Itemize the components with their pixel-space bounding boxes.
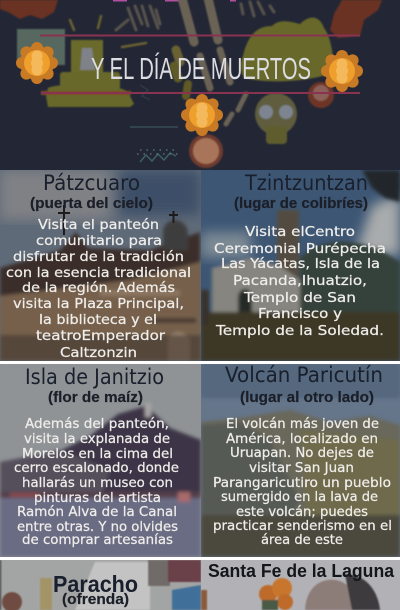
decoration: bones [70,0,274,124]
panel: Pátzcuaro [0,170,201,361]
photo: church and sky [0,170,201,361]
decoration: altar [17,29,134,107]
subheading: (lugar al otro lado) [240,389,374,406]
text block: Ceremonial Purépecha [214,241,386,257]
text block: este volcán; puedes [236,504,368,520]
panel: Isla de Janitzio [0,364,201,557]
text block [14,416,179,548]
text block: Uruapan. No dejes de [230,445,374,461]
decoration: skull [255,93,297,144]
text block: hallarás un museo con [22,475,173,491]
photo: temple and sky [201,170,400,361]
decoration: bread [241,18,334,81]
text block: disfrutar de la tradición [13,249,184,265]
photo: island and lake [0,364,201,557]
text block: área de este [261,532,343,548]
text block: Francisco y [258,306,342,322]
heading: Isla de Janitzio [25,365,164,389]
text block: la biblioteca y el [39,312,157,328]
text block: con la esencia tradicional [6,265,191,281]
heading: Pátzcuaro [43,171,140,195]
heading: Paracho [53,571,138,597]
subheading: (flor de maíz) [48,389,143,406]
heading: Volcán Paricutín [225,363,383,387]
subheading: (lugar de colibríes) [234,195,368,212]
text block: de la región. Además [22,280,175,296]
text block: sumergido en la lava de [221,489,378,505]
panel: Volcán Paricutín [201,363,400,557]
text block: pinturas del artista [34,490,161,506]
photo: street [0,560,201,610]
decoration: orange slices [189,82,334,168]
text block: visita la Plaza Principal, [13,296,184,312]
heading: Santa Fe de la Laguna [208,561,395,581]
text block [6,217,191,361]
text block: entre otras. Y no olvides [17,519,178,535]
text block: Morelos en la cima del [22,446,173,462]
text block: practicar senderismo en el [213,518,392,534]
subheading: (puerta del cielo) [30,195,153,212]
text block: comunitario para [36,233,162,249]
panel: Paracho [0,560,201,610]
decoration: pink top trims [113,0,236,2]
icon: marigold left [16,42,58,84]
text block [214,224,386,339]
text block: Templo de San [243,290,356,306]
decoration: rules [40,34,360,94]
panel: Santa Fe de la Laguna [201,560,400,610]
text block: visita la explanada de [24,431,170,447]
photo: woman and flowers [201,560,400,610]
photo: volcano [201,364,400,557]
text block: cerro escalonado, donde [14,460,179,476]
text block: Las Yácatas, Isla de la [221,256,380,272]
text block: El volcán más joven de [226,416,379,432]
decoration: teal grass [130,85,178,162]
decoration: top marigold leaves [0,0,382,38]
header panel [0,0,400,170]
text block: de comprar artesanías [22,532,173,548]
text block [213,416,392,548]
text block: visitar San Juan [249,460,354,476]
text block: Templo de la Soledad. [215,323,384,339]
heading: Tzintzuntzan [244,171,368,195]
panel: Tzintzuntzan [201,170,400,361]
text block: teatroEmperador [36,328,166,344]
text block: Visita el panteón [38,217,159,233]
text block: Visita elCentro [245,224,355,240]
icon: marigold right [321,50,363,92]
text block: Ramón Alva de la Canal [17,504,177,520]
text block: Pacanda,Ihuatzio, [233,273,367,289]
icon: marigold centre [181,94,223,136]
subheading: (ofrenda) [62,591,129,608]
text block: Además del panteón, [25,416,169,432]
text block: América, localizado en [226,431,378,447]
text block: Parangaricutiro un pueblo [213,475,391,491]
text block: Caltzonzin [60,345,137,361]
